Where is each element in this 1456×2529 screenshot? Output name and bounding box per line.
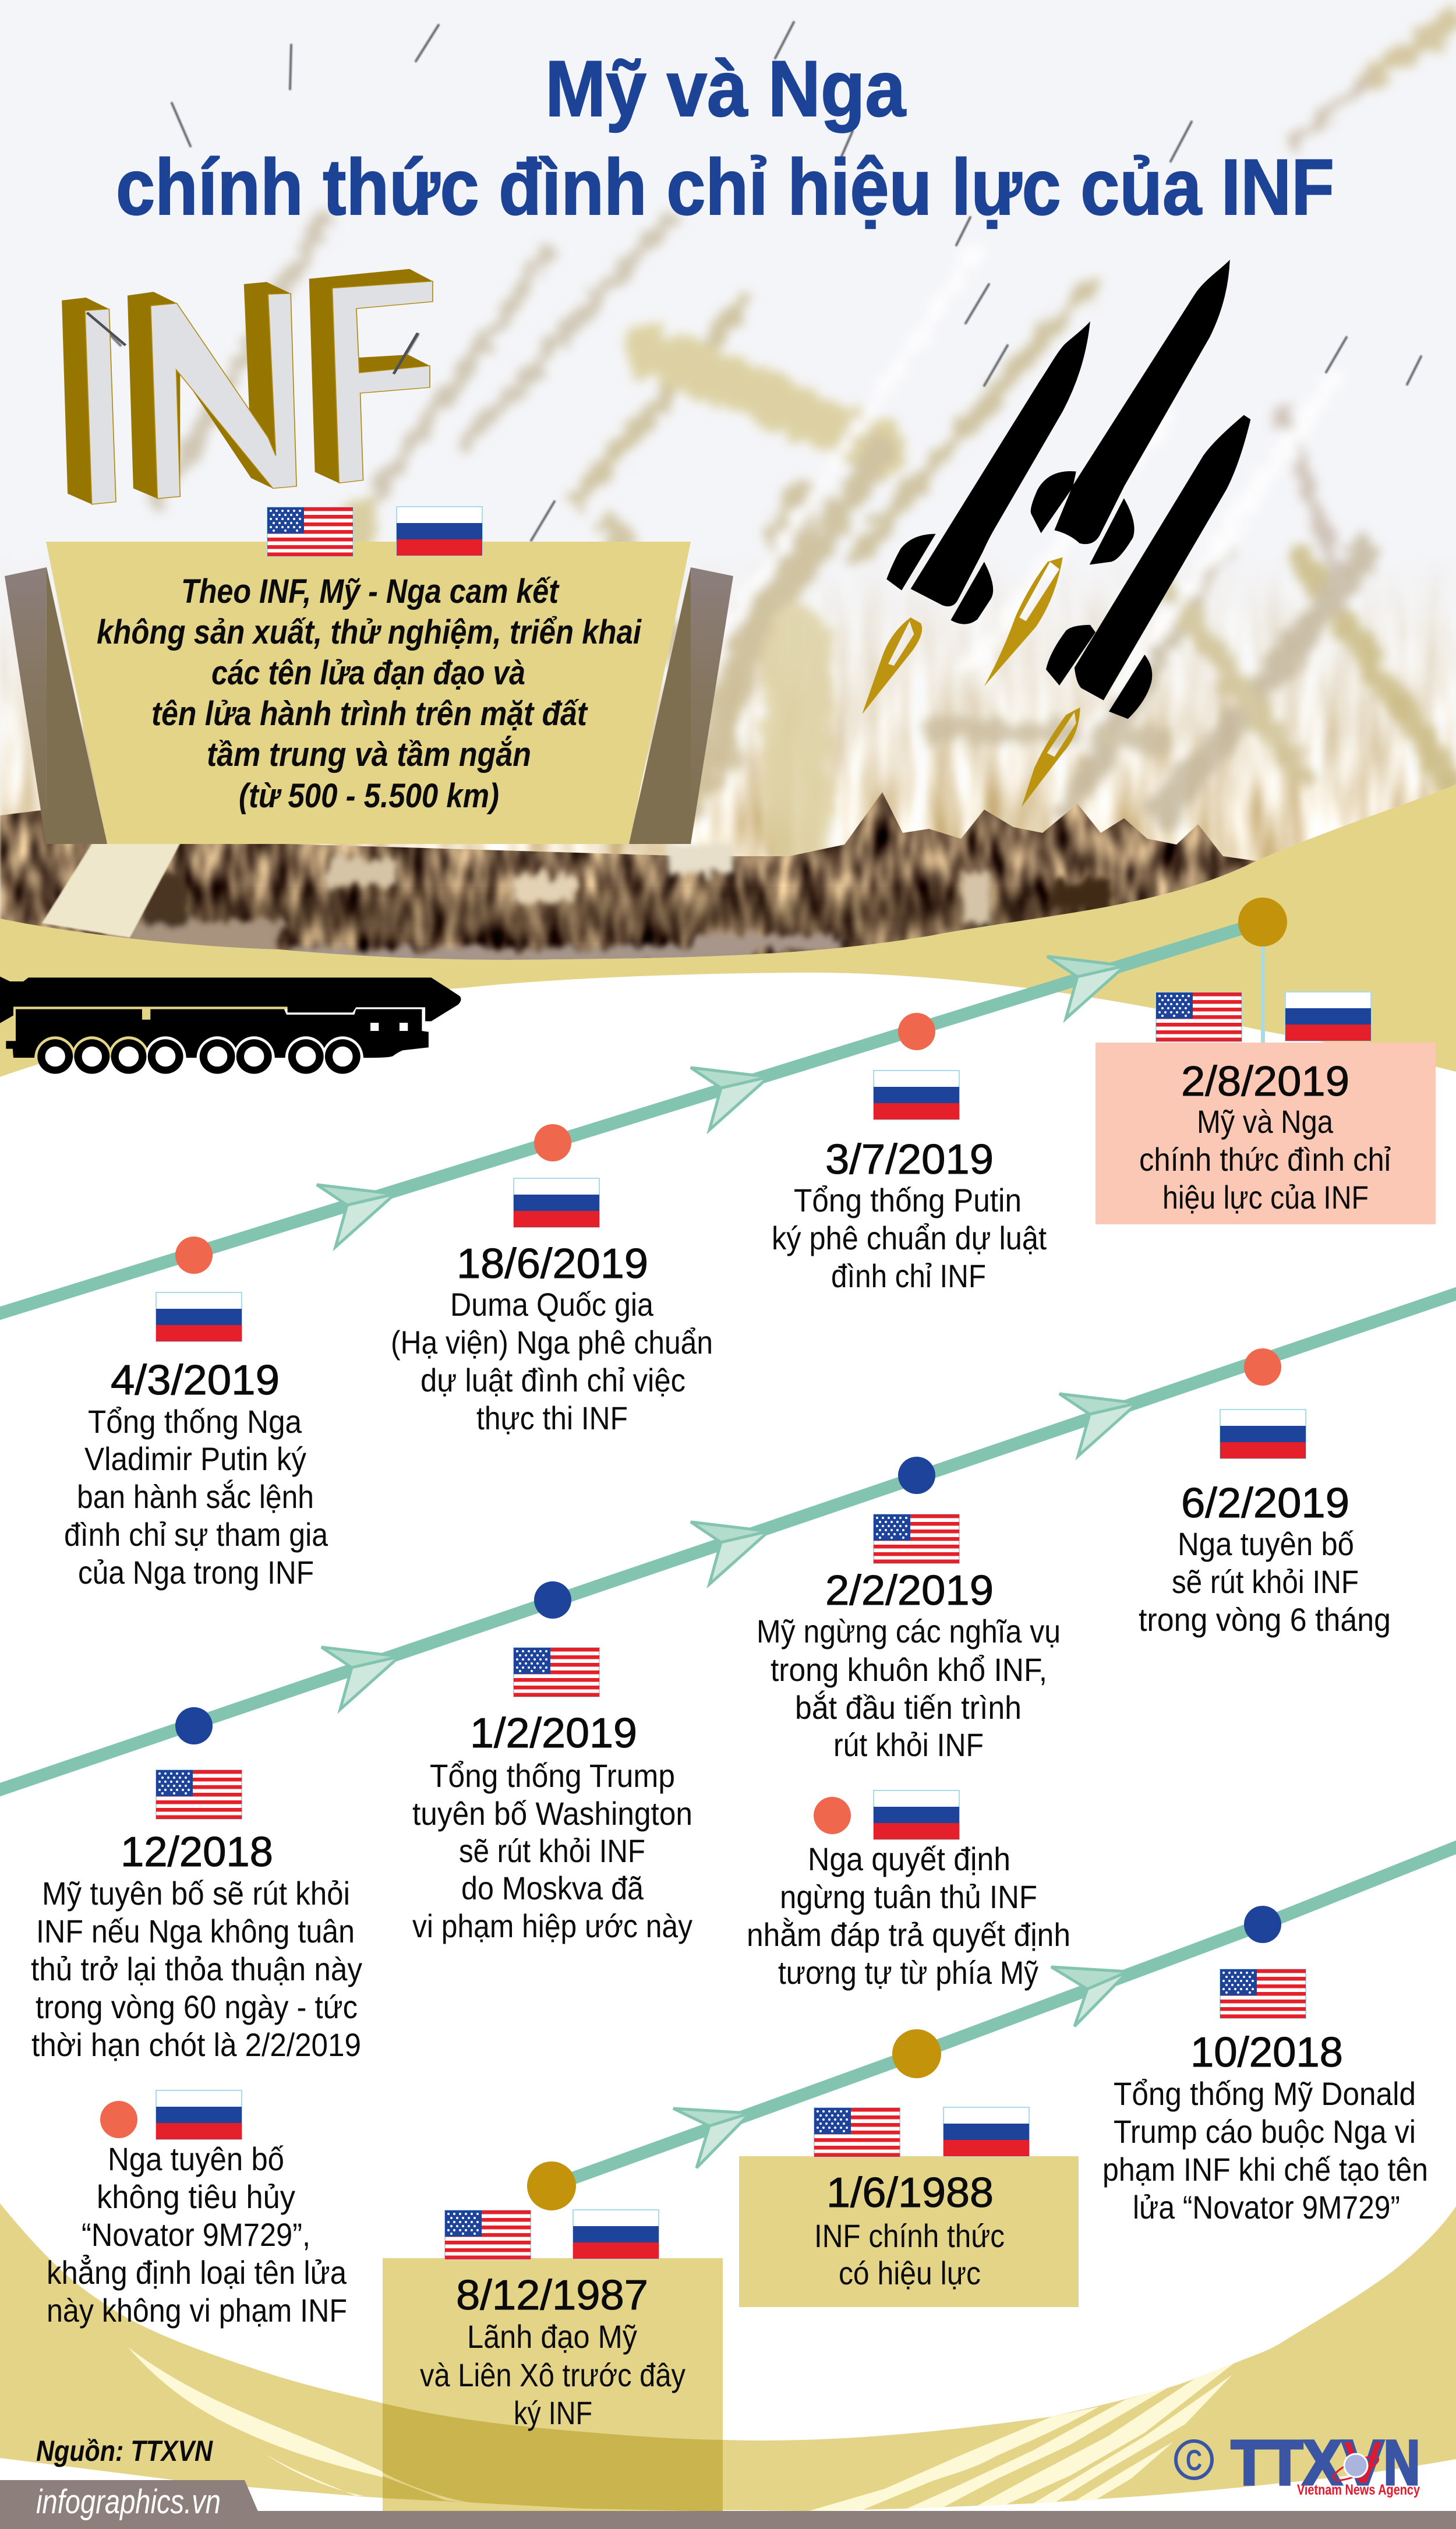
Russian response text: này không vi phạm INF [47,2292,347,2329]
flag: Russia [156,2090,242,2139]
description [391,1286,713,1436]
Russian response text: Nga tuyên bố [108,2141,284,2177]
icon: globe with orbit [1331,2452,1381,2485]
description: Duma Quốc gia [450,1286,654,1323]
description: Tổng thống Putin [794,1182,1022,1218]
marker 8/12/1987 [527,2161,576,2210]
description: Mỹ tuyên bố sẽ rút khỏi [42,1875,350,1912]
icon: three black rockets with gold flames [862,260,1250,807]
marker 6/2/2019 [1244,1348,1281,1386]
logo: TTXVN Vietnam News Agency: TTX [1231,2427,1342,2498]
description: đình chỉ sự tham gia [64,1516,328,1553]
description: Vladimir Putin ký [84,1440,306,1477]
marker 10/2018 [1244,1906,1281,1943]
event: 8/12/1987 [373,2210,723,2512]
marker 2/2/2019 [898,1457,935,1494]
source note: Nguồn: TTXVN [36,2435,213,2467]
description [1139,1103,1391,1216]
description: sẽ rút khỏi INF [459,1832,645,1869]
flag: Russia [1285,992,1371,1041]
event: 18/6/2019 [391,1178,713,1436]
event: 2/2/2019 [747,1514,1070,1991]
description: Tổng thống Nga [88,1403,302,1440]
flag: USA [1156,992,1242,1041]
date: 10/2018 [1190,2029,1343,2076]
connector to final event [1261,922,1265,1044]
flag: USA [156,1770,242,1819]
hero text: tên lửa hành trình trên mặt đất [151,695,588,733]
flag: Russia [156,1292,242,1341]
flag: Russia [874,1071,959,1119]
description: tuyên bố Washington [412,1795,692,1832]
logo: TTXVN Vietnam News Agency: V [1342,2427,1384,2498]
description [814,2217,1005,2291]
background photo: missile launch plumes [0,0,1456,967]
description [412,1757,692,1944]
flag: Russia [1220,1410,1306,1458]
Russian response text: “Novator 9M729”, [82,2216,310,2253]
description [64,1403,328,1591]
arrow [321,1647,400,1709]
timeline row 1 [0,898,1287,1314]
marker 3/7/2019 [898,1013,935,1050]
arrow [691,1068,769,1130]
arrow [1047,956,1125,1019]
description: phạm INF khi chế tạo tên [1102,2151,1428,2188]
description: Nga tuyên bố [1178,1525,1354,1562]
timeline row 2 [0,1293,1456,1790]
icon: copyright: C [1186,2444,1202,2477]
flag: Russia [514,1178,599,1227]
marker 1/2/2019 [534,1581,571,1619]
logo: TTXVN Vietnam News Agency: N [1384,2427,1420,2498]
marker 4/3/2019 [175,1237,213,1274]
description [757,1613,1061,1763]
description: có hiệu lực [839,2255,981,2291]
date: 18/6/2019 [457,1241,648,1287]
description: trong vòng 60 ngày - tức [36,1988,358,2025]
description: hiệu lực của INF [1162,1179,1369,1216]
hero text: các tên lửa đạn đạo và [211,654,525,692]
Russian response text [747,1841,1070,1991]
date: 1/2/2019 [470,1710,637,1757]
description [772,1182,1047,1294]
Russian response text: Nga quyết định [808,1841,1010,1877]
flag: USA [874,1514,959,1563]
arrow [317,1185,395,1247]
marker 1/6/1988 [892,2029,941,2078]
footer site name: infographics.vn [36,2483,221,2521]
Russian response text: tương tự từ phía Mỹ [778,1954,1038,1991]
date: 3/7/2019 [825,1136,994,1183]
description: dự luật đình chỉ việc [420,1362,685,1398]
marker: Russian response [814,1797,851,1834]
Russian response text: không tiêu hủy [97,2178,295,2215]
description: Trump cáo buộc Nga vi [1114,2113,1416,2150]
arrow [1059,1394,1137,1456]
hero flag: USA [267,507,353,556]
hero text: tầm trung và tầm ngắn [207,736,531,773]
description: và Liên Xô trước đây [420,2357,685,2393]
icon: missile launcher truck [0,977,461,1074]
description: Tổng thống Trump [430,1757,675,1794]
description: thực thi INF [476,1400,628,1436]
Russian response text: ngừng tuân thủ INF [780,1878,1037,1915]
description: chính thức đình chỉ [1139,1141,1391,1178]
event: 3/7/2019 [772,1071,1047,1294]
description [31,1875,362,2063]
description: lửa “Novator 9M729” [1133,2189,1400,2226]
hero panel: INF commitment [5,507,733,844]
description: ký INF [514,2394,592,2431]
flag: Russia [943,2107,1029,2156]
marker: Russian response [100,2101,137,2138]
bottom beige arcs [0,2203,1456,2512]
description: Mỹ ngừng các nghĩa vụ [757,1613,1061,1649]
event: 2/8/2019 [1095,992,1436,1224]
description: INF nếu Nga không tuân [36,1913,355,1949]
marker 2/8/2019 [1238,898,1287,946]
date: 6/2/2019 [1181,1480,1349,1527]
description [420,2318,685,2431]
event: 4/3/2019 [64,1292,328,1591]
description: Tổng thống Mỹ Donald [1114,2075,1416,2112]
event: 1/2/2019 [412,1648,692,1944]
date: 1/6/1988 [826,2170,994,2216]
hero text: không sản xuất, thử nghiệm, triển khai [97,613,642,651]
date: 2/2/2019 [825,1567,994,1614]
3D INF letters [62,269,433,504]
arrow [691,1522,769,1584]
marker 18/6/2019 [534,1124,571,1161]
description: bắt đầu tiến trình [795,1689,1022,1726]
description: thủ trở lại thỏa thuận này [31,1951,362,1987]
date: 2/8/2019 [1181,1058,1349,1105]
title [116,44,1334,231]
description: trong khuôn khổ INF, [771,1651,1047,1688]
event: 6/2/2019 [1139,1410,1391,1638]
event: 1/6/1988 [739,2107,1079,2307]
date: 8/12/1987 [456,2272,648,2319]
footer bar [0,2480,1456,2529]
marker 12/2018 [175,1707,213,1744]
hero text: (từ 500 - 5.500 km) [239,777,499,815]
description: rút khỏi INF [833,1726,984,1763]
Russian response text [47,2141,347,2329]
description: ký phê chuẩn dự luật [772,1220,1047,1256]
description: vi phạm hiệp ước này [412,1908,692,1944]
event: 12/2018 [31,1770,362,2329]
date: 4/3/2019 [111,1357,280,1404]
Russian response text: khẳng định loại tên lửa [47,2254,347,2291]
description [1139,1525,1391,1638]
description: thời hạn chót là 2/2/2019 [31,2026,361,2063]
arrow [1051,1967,1128,2026]
flag: USA [514,1648,599,1697]
title: Mỹ và Nga [545,44,906,133]
description: Lãnh đạo Mỹ [467,2318,637,2355]
flag: USA [445,2210,531,2259]
date: 12/2018 [121,1829,273,1875]
hero text [97,573,642,815]
flag: Russia [874,1790,959,1839]
logo: TTXVN Vietnam News Agency: Vietnam News Agency [1297,2482,1420,2498]
description [1102,2075,1428,2226]
title: chính thức đình chỉ hiệu lực của INF [116,143,1334,231]
hero text: Theo INF, Mỹ - Nga cam kết [181,573,560,610]
timeline row 3 [527,1846,1456,2210]
flag: USA [814,2108,900,2157]
description: của Nga trong INF [78,1554,314,1591]
flag: USA [1220,1969,1306,2018]
logo: TTXVN Vietnam News Agency [1176,2427,1420,2498]
icon: copyright [1176,2441,1212,2478]
Russian response text: nhằm đáp trả quyết định [747,1916,1070,1953]
hero flag: Russia [397,507,482,556]
event: 10/2018 [1102,1969,1428,2226]
flag: Russia [573,2210,659,2259]
arrow [673,2108,750,2168]
beige wave under photo [0,785,1456,1077]
description: do Moskva đã [461,1870,644,1906]
description: (Hạ viện) Nga phê chuẩn [391,1324,713,1361]
description: trong vòng 6 tháng [1139,1601,1391,1638]
description: ban hành sắc lệnh [77,1478,314,1515]
description: Mỹ và Nga [1197,1103,1334,1140]
description: đình chỉ INF [831,1258,986,1294]
description: INF chính thức [814,2217,1005,2254]
description: sẽ rút khỏi INF [1172,1563,1359,1600]
